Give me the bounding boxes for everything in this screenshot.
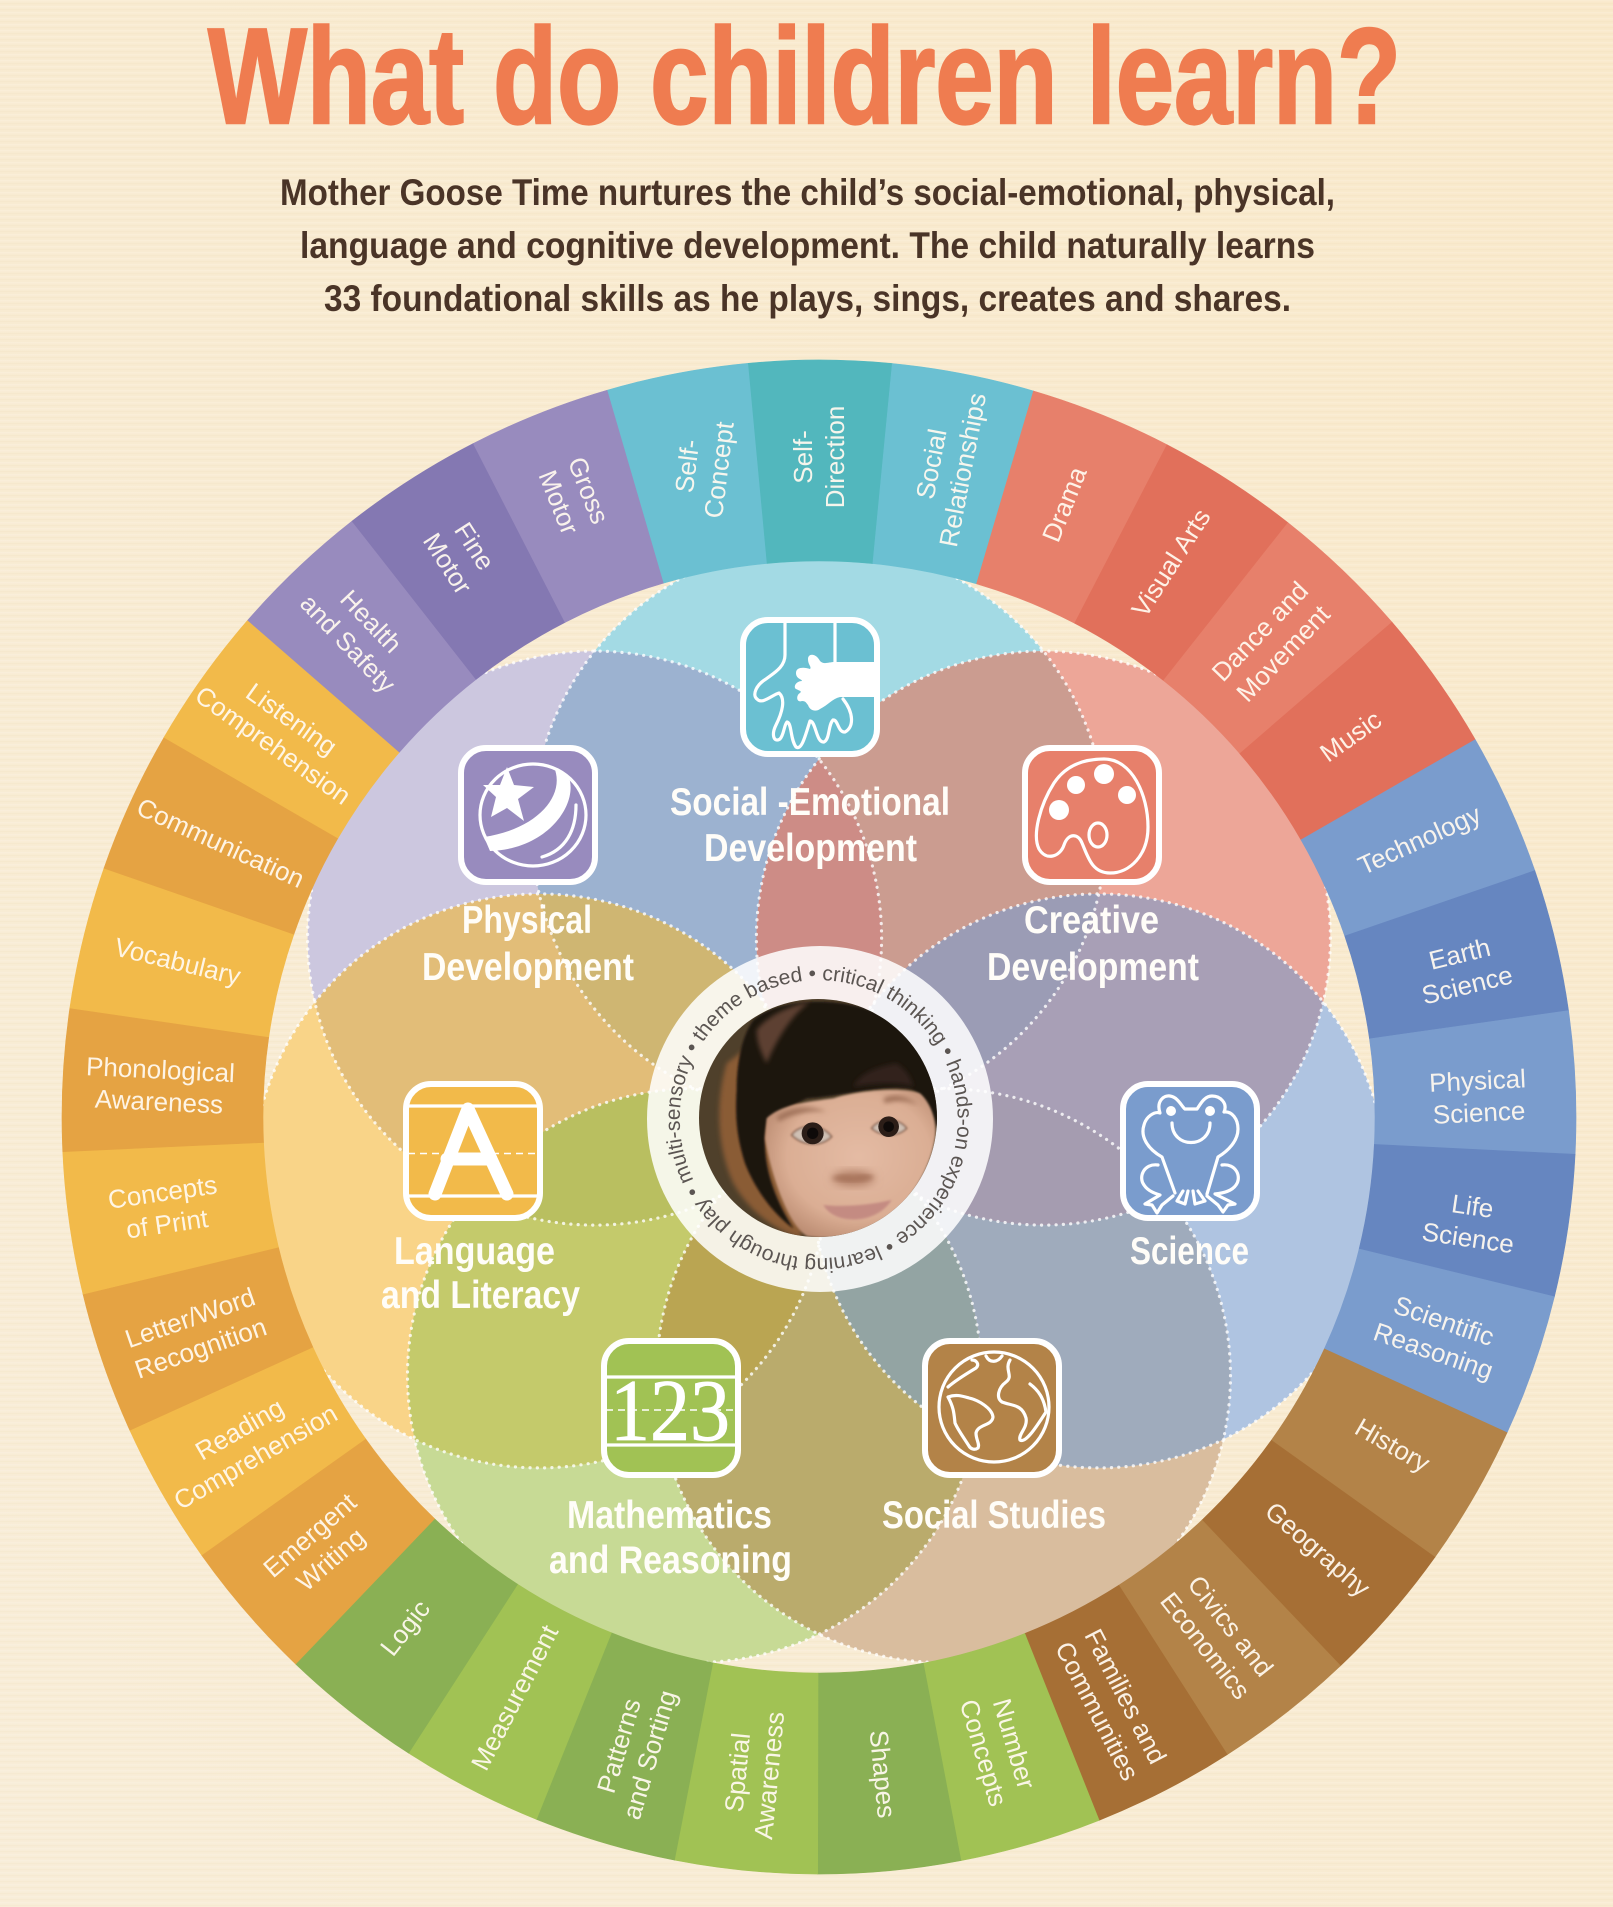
label: Social Studies: Social Studies [882,1494,1106,1537]
segment: Self-Direction: Self- [788,430,818,484]
segment: Listening Comprehension: Comprehension [190,680,357,811]
label: Mathematics and Reasoning: Mathematics [567,1494,772,1537]
segment: Self-Direction: Direction [820,406,850,508]
segment: Health and Safety: and Safety [294,588,402,699]
icon: physical ball [461,748,595,882]
segment: Communication [101,736,346,952]
label: Language and Literacy [381,1230,580,1317]
segment: History: History [1350,1412,1435,1478]
label: Physical Development [422,899,634,989]
icon: mathematics 123: 123 [610,1363,730,1460]
segment: Logic: Logic [374,1594,436,1661]
label: Creative Development: Creative [1024,899,1159,942]
segment: Number Concepts: Number [987,1695,1042,1793]
segment: Shapes [799,1661,962,1878]
segment: Social Relationships: Relationships [933,390,992,549]
segment: Civics and Economics: Civics and [1182,1569,1279,1682]
icon: social-emotional hand [743,620,877,754]
icon: letter A [406,1084,540,1218]
segment: Earth Science: Earth [1426,932,1493,976]
segment: Music: Music [1314,704,1387,768]
segment: Visual Arts [1058,442,1290,691]
segment: Phonological Awareness: Awareness [94,1084,224,1120]
intro text [280,172,1335,319]
segment: Emergent Writing: Writing [290,1522,371,1597]
icon: creative palette [1025,748,1159,882]
segment: Technology [1293,738,1538,954]
segment: Geography [1189,1426,1438,1668]
label: Physical Development: Physical [462,899,592,942]
overlapping development circles [252,543,1386,1663]
icon: social studies globe [925,1341,1059,1475]
segment: Physical Science: Science [1432,1095,1526,1130]
segment: Families and Communities: Communities [1049,1637,1145,1785]
segment: Fine Motor: Motor [417,527,478,600]
segment: Health and Safety: Health [334,584,408,659]
segment: Listening Comprehension [161,618,411,854]
segment: Reading Comprehension [127,1330,375,1557]
segment: Social Relationships [854,360,1034,587]
segment: Letter/Word Recognition: Recognition [131,1311,270,1385]
segment: Letter/Word Recognition [80,1229,319,1432]
segment: Emergent Writing: Emergent [257,1486,363,1583]
segment: Technology: Technology [1353,799,1485,881]
segment: Dance and Movement: Dance and [1206,575,1314,687]
segment: Gross Motor [472,387,681,630]
segment: Physical Science: Physical [1428,1063,1527,1098]
label: Social-Emotional Development: Development [704,827,917,870]
intro text: 33 foundational skills as he plays, sings, creates and shares. [324,278,1291,319]
segment: Fine Motor: Fine [448,517,501,576]
segment: Shapes: Shapes [864,1729,902,1819]
icon: science frog [1123,1084,1257,1218]
segment: Dance and Movement: Movement [1230,599,1336,708]
segment: Self-Concept [606,360,786,587]
segment: Self-Concept: Self- [669,438,705,494]
label: Social-Emotional Development: Social -Emotional [670,781,950,824]
segment: Life Science [1356,1125,1579,1297]
intro text: language and cognitive development. The child naturally learns [300,225,1315,266]
segment: Dance and Movement [1149,520,1395,767]
segment: Spatial Awareness: Spatial [719,1731,756,1813]
segment: Communication: Communication [132,792,309,894]
segment: Gross Motor: Gross [562,453,615,528]
segment: Civics and Economics [1103,1508,1343,1757]
segment: Number Concepts: Concepts [954,1696,1013,1810]
segment: Gross Motor: Motor [533,466,585,539]
segment: Families and Communities: Families and [1079,1624,1173,1769]
segment: Patterns and Sorting: and Sorting [616,1687,683,1823]
label: Language and Literacy: and Literacy [381,1274,580,1317]
outer skills ring [59,360,1579,1878]
segment: Self-Direction [748,360,892,564]
center medallion [647,946,993,1292]
segment: Logic [293,1507,533,1756]
icon: mathematics 123 [604,1341,738,1475]
segment: Scientific Reasoning: Scientific [1390,1290,1498,1352]
segment: Concepts of Print [59,1123,281,1295]
segment: Phonological Awareness: Phonological [85,1051,236,1088]
segment: Self-Concept: Concept [698,419,740,520]
label: Physical Development: Development [422,946,634,989]
label: Science: Science [1130,1230,1249,1273]
segment: Concepts of Print: of Print [124,1203,211,1244]
segment: Measurement [407,1575,629,1823]
segment: Earth Science [1340,870,1572,1058]
segment: Listening Comprehension: Listening [241,677,343,762]
segment: Phonological Awareness [59,1008,270,1162]
segment: Health and Safety [245,518,490,765]
label: Mathematics and Reasoning: and Reasoning [549,1539,792,1582]
segment: Number Concepts [905,1628,1100,1864]
label: Language and Literacy: Language [394,1230,555,1273]
segment: Visual Arts: Visual Arts [1125,503,1217,622]
segment: Reading Comprehension: Comprehension [168,1398,342,1516]
segment: Letter/Word Recognition: Letter/Word [121,1281,259,1354]
segment: Social Relationships: Social [910,426,953,502]
segment: Families and Communities [1007,1576,1229,1824]
segment: Geography: Geography [1259,1496,1376,1603]
label: Mathematics and Reasoning [549,1494,792,1582]
segment: Scientific Reasoning: Reasoning [1370,1316,1497,1385]
segment: Patterns and Sorting: Patterns [591,1695,647,1796]
segment: History [1262,1332,1510,1559]
label: Creative Development: Development [987,946,1199,989]
segment: Drama [959,388,1168,631]
segment: Concepts of Print: Concepts [106,1169,219,1215]
segment: Reading Comprehension: Reading [190,1392,289,1466]
segment: Physical Science [1368,1010,1579,1164]
label: Social-Emotional Development [670,781,950,870]
segment: Fine Motor [350,440,581,690]
segment: Vocabulary: Vocabulary [112,932,244,991]
segment: Patterns and Sorting [535,1627,731,1863]
circular motto text: • multi-sensory • theme based • critical thinking • hands-on experience • learning through play [666,966,972,1273]
segment: Spatial Awareness: Awareness [748,1710,790,1841]
segment: Music [1229,620,1478,856]
segment: Life Science: Life [1450,1188,1495,1224]
segment: Scientific Reasoning [1318,1231,1558,1434]
segment: Vocabulary [66,867,299,1056]
photo: child's face [699,998,939,1238]
segment: Drama: Drama [1036,462,1093,546]
segment: Emergent Writing [199,1424,447,1666]
segment: Measurement: Measurement [465,1619,565,1775]
segment: Civics and Economics: Economics [1154,1586,1257,1705]
label: Creative Development [987,899,1199,989]
intro text: Mother Goose Time nurtures the child’s social-emotional, physical, [280,172,1335,213]
segment: Earth Science: Science [1419,959,1516,1010]
segment: Life Science: Science [1420,1216,1516,1259]
segment: Spatial Awareness [674,1661,837,1877]
